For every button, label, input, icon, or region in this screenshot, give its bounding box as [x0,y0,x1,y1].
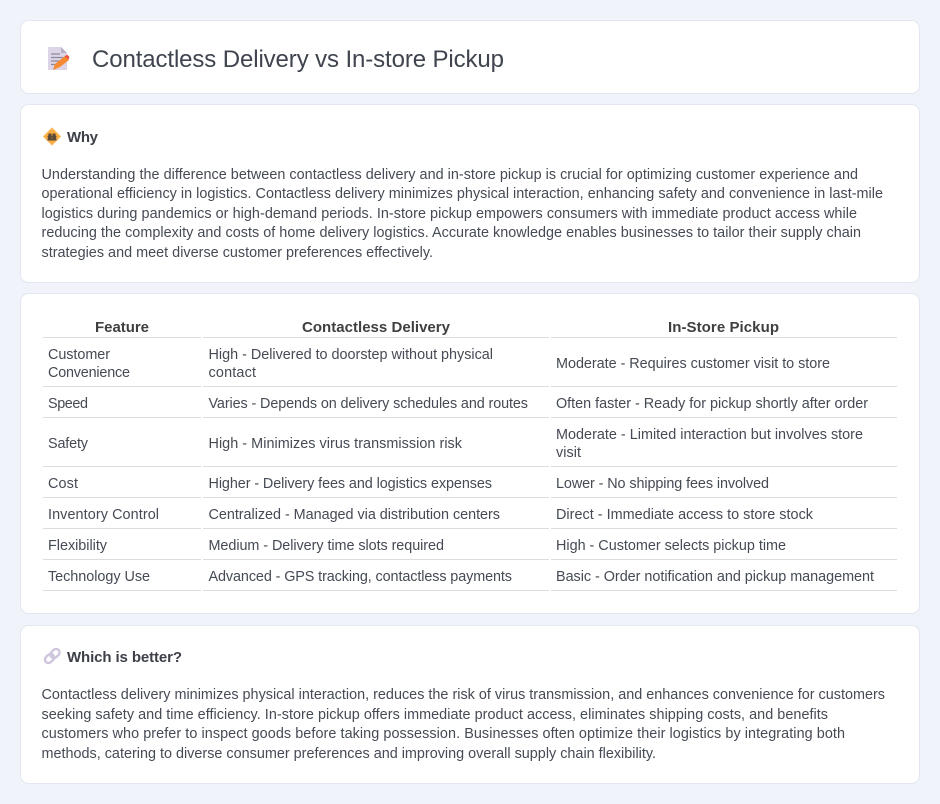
table row: cost: Cost [48,476,78,492]
table row: technology use: Advanced - GPS tracking, contactless payments [208,569,512,585]
table row: flexibility: High - Customer selects pickup time [556,538,786,554]
heading: which is better: Which is better? [67,649,182,666]
text block: why paragraph [42,167,883,261]
table row: inventory control: Direct - Immediate access to store stock [556,507,814,523]
table row: customer convenience [48,347,830,381]
text block: which is better paragraph: methods, catering to diverse consumer preferences and improving overall supply chain flexibility. [42,746,656,762]
icon: chain link [43,647,61,665]
table row: safety [48,427,863,461]
table row: safety: Moderate - Limited interaction but involves store [556,427,863,443]
table row: flexibility: Medium - Delivery time slots required [208,538,444,554]
table row: inventory control: Inventory Control [48,507,159,523]
text block: which is better paragraph: Contactless delivery minimizes physical interaction, reduces the risk of virus transmission, and enhances convenience for customers [42,687,885,703]
table header row: Contactless Delivery [302,319,451,336]
table row: technology use [48,569,874,585]
table row: cost: Lower - No shipping fees involved [556,476,769,492]
table row: cost [48,476,769,492]
table row: flexibility: Flexibility [48,538,108,554]
text block: which is better paragraph: seeking safety and time efficiency. In-store pickup offers immediate product access, eliminates shipping costs, and benefits [42,707,828,723]
text block: which is better paragraph [42,687,885,762]
table row: customer convenience: Customer [48,347,110,363]
text block: why paragraph: operational efficiency in logistics. Contactless delivery minimizes physical interaction, enhancing safety and convenience in last-mile [42,186,883,202]
table row: speed [48,396,868,412]
table row: safety: Safety [48,436,89,452]
table header row: In-Store Pickup [668,319,779,336]
text block: why paragraph: strategies and meet diverse customer preferences effectively. [42,245,433,261]
table row: flexibility [48,538,786,554]
table row: inventory control [48,507,814,523]
icon: document with pencil [48,47,70,70]
text block: why paragraph: reducing the complexity and costs of home delivery logistics. Accurate knowledge enables businesses to tailor their supply chain [42,225,861,241]
icon: warning diamond [44,128,60,145]
table row: safety: High - Minimizes virus transmission risk [208,436,463,452]
text block: which is better paragraph: customers who prefer to inspect goods before taking possession. Businesses often optimize their logistics by integrating both [42,726,845,742]
panel: title header [20,20,920,94]
table row: safety: visit [556,445,581,461]
table row: customer convenience: High - Delivered to doorstep without physical [208,347,493,363]
table row: speed: Varies - Depends on delivery schedules and routes [208,396,528,412]
table row: speed: Speed [48,396,88,412]
table row: inventory control: Centralized - Managed via distribution centers [208,507,500,523]
table row: customer convenience: Moderate - Requires customer visit to store [556,356,830,372]
table header row: Feature [95,319,149,336]
panel: why [20,104,920,282]
table row: technology use: Basic - Order notification and pickup management [556,569,874,585]
table row: customer convenience: contact [208,365,256,381]
text block: why paragraph: logistics during pandemics or high-demand periods. In-store pickup empowers consumers with immediate product access while [42,206,857,222]
heading: why: Why [67,129,99,146]
title: Contactless Delivery vs In-store Pickup [92,46,504,73]
table row: speed: Often faster - Ready for pickup shortly after order [556,396,868,412]
panel: comparison table [20,294,920,614]
table row: technology use: Technology Use [48,569,150,585]
panel: which is better [20,626,920,784]
text block: why paragraph: Understanding the difference between contactless delivery and in-store pickup is crucial for optimizing customer experience and [42,167,858,183]
table row: customer convenience: Convenience [48,365,130,381]
table header row [95,319,779,336]
table row: cost: Higher - Delivery fees and logistics expenses [208,476,492,492]
